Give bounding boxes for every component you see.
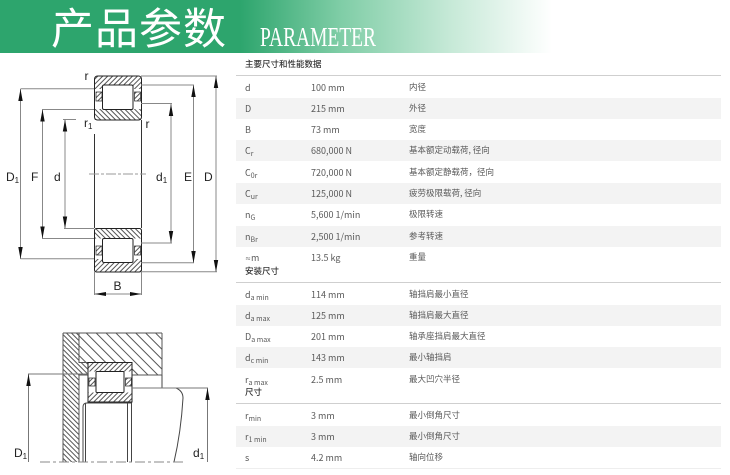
row Da max — [245, 330, 486, 345]
row r1 min — [236, 426, 721, 447]
dimension labels: 1 — [163, 176, 168, 185]
row Cur: 125,000 N — [311, 187, 352, 200]
row D — [236, 98, 721, 119]
row nBr: 参考转速 — [409, 230, 443, 242]
row nG: nG — [245, 208, 255, 223]
row da max: 125 mm — [311, 309, 345, 322]
table section heading: main dimensions: 主要尺寸和性能数据 — [245, 58, 322, 70]
row Cr — [236, 140, 721, 161]
row C0r: 基本额定静载荷，径向 — [409, 166, 494, 178]
centre line lower — [40, 461, 183, 463]
row Cur: 疲劳极限载荷, 径向 — [409, 187, 481, 199]
row d: d — [245, 81, 251, 94]
row D: 215 mm — [311, 102, 345, 115]
row dc min — [236, 347, 721, 368]
D1 arrow — [14, 374, 88, 462]
spacer plate — [63, 333, 88, 462]
row m: ≈m — [245, 251, 259, 264]
row C0r — [245, 166, 494, 181]
dimension lines — [20, 76, 217, 272]
row s: 轴向位移 — [409, 451, 443, 463]
row Da max: Da max — [245, 330, 271, 345]
dimension labels: d — [156, 170, 163, 184]
row da min — [245, 288, 469, 303]
row r1 min: 3 mm — [311, 430, 335, 443]
table section heading: mounting dimensions: 安装尺寸 — [245, 265, 279, 277]
bore lines — [94, 120, 142, 228]
row ra max: ra max — [245, 373, 268, 388]
row da min: 114 mm — [311, 288, 345, 301]
bearing cross-section drawing — [6, 69, 218, 462]
row nBr: 2,500 1/min — [311, 230, 360, 243]
row nG — [245, 208, 443, 223]
d1 arrow: 1 — [200, 452, 205, 461]
table section heading: dimensions: 尺寸 — [245, 386, 262, 398]
row D: D — [245, 102, 251, 115]
row r min: 最小倒角尺寸 — [409, 409, 460, 421]
row d: 内径 — [409, 81, 426, 93]
row Da max: 201 mm — [311, 330, 345, 343]
dimension B: B — [113, 279, 122, 293]
D1 arrow: D — [14, 446, 23, 460]
dimension B — [94, 272, 142, 296]
dimension labels: d — [54, 170, 61, 184]
row s: 4.2 mm — [311, 451, 342, 464]
D1 arrow: 1 — [23, 452, 28, 461]
row d: 100 mm — [311, 81, 345, 94]
d1 arrow: d — [193, 446, 200, 460]
dimension labels — [6, 69, 213, 185]
dimension labels: D — [204, 170, 213, 184]
row B: B — [245, 123, 251, 136]
d1 arrow — [132, 388, 210, 462]
row Cr: Cr — [245, 144, 253, 159]
housing — [79, 333, 162, 375]
dimension labels: 1 — [88, 122, 93, 131]
row r min: rmin — [245, 409, 261, 424]
dimension labels: D — [6, 170, 15, 184]
row C0r: C0r — [245, 166, 257, 181]
row ra max: 2.5 mm — [311, 373, 342, 386]
row m — [245, 251, 426, 264]
row Da max: 轴承座挡肩最大直径 — [409, 330, 486, 342]
mounting drawing — [14, 333, 210, 462]
row C0r: 720,000 N — [311, 166, 352, 179]
dimension labels: F — [31, 170, 38, 184]
row r min: 3 mm — [311, 409, 335, 422]
centre line — [89, 173, 146, 175]
row Cur — [236, 183, 721, 204]
row D: 外径 — [409, 102, 426, 114]
dimension labels: r — [84, 116, 88, 130]
row dc min: 143 mm — [311, 351, 345, 364]
row da min: 轴挡肩最小直径 — [409, 288, 469, 300]
row Cr: 680,000 N — [311, 144, 352, 157]
row m: 13.5 kg — [311, 251, 340, 264]
row r1 min: r1 min — [245, 430, 267, 445]
row nG: 极限转速 — [409, 208, 443, 220]
row d — [245, 81, 426, 94]
upper bearing section — [94, 76, 142, 120]
row B — [245, 123, 426, 136]
dimension labels: r — [84, 69, 88, 83]
row B: 73 mm — [311, 123, 340, 136]
row da max — [236, 305, 721, 326]
row da max: da max — [245, 309, 270, 324]
row dc min: 最小轴挡肩 — [409, 351, 452, 363]
dimension labels: r — [146, 117, 150, 131]
row nG: 5,600 1/min — [311, 208, 360, 221]
shaft outline — [83, 375, 183, 462]
row da min: da min — [245, 288, 269, 303]
row r1 min: 最小倒角尺寸 — [409, 430, 460, 442]
mounted bearing — [88, 362, 132, 402]
row Cr: 基本额定动载荷, 径向 — [409, 144, 490, 156]
row r min — [245, 409, 460, 424]
row dc min: dc min — [245, 351, 268, 366]
row Cur: Cur — [245, 187, 258, 202]
row m: 重量 — [409, 251, 426, 263]
row s: s — [245, 451, 249, 464]
row nBr — [236, 226, 721, 247]
lower bearing section — [94, 228, 142, 272]
row s — [236, 447, 721, 469]
row ra max — [245, 373, 460, 388]
row nBr: nBr — [245, 230, 258, 245]
row da max: 轴挡肩最大直径 — [409, 309, 469, 321]
dimension labels: E — [184, 170, 192, 184]
dimension arrows — [18, 76, 218, 272]
dimension labels: 1 — [15, 176, 20, 185]
row B: 宽度 — [409, 123, 426, 135]
header banner — [0, 0, 552, 53]
row ra max: 最大凹穴半径 — [409, 373, 460, 385]
